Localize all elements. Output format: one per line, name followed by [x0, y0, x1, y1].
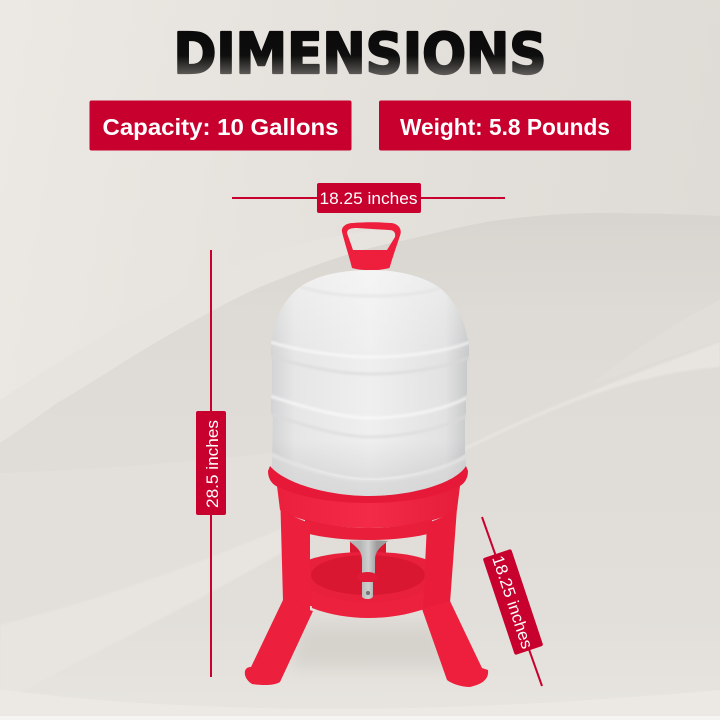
- badge: capacity: [90, 100, 352, 150]
- dimension: depth: 18.25 inches: [488, 553, 536, 651]
- leg left: [280, 508, 310, 612]
- lower stem: [362, 582, 373, 599]
- dimension: depth: [482, 517, 543, 686]
- tray: [308, 552, 428, 606]
- tray front band: [310, 590, 427, 618]
- dimension: width: [232, 183, 505, 213]
- handle and cap: [342, 222, 401, 270]
- stem collar: [357, 572, 378, 582]
- dimension: width: 18.25 inches: [320, 190, 418, 208]
- badge: weight: [379, 100, 631, 150]
- tray well: [311, 555, 425, 595]
- under-bowl ring: [305, 519, 432, 540]
- valve housing: [350, 541, 386, 556]
- base rim: [268, 466, 468, 503]
- stem: [349, 540, 388, 574]
- tank: [265, 265, 475, 500]
- product: poultry drinker: [245, 222, 488, 687]
- dimension: height: [196, 250, 226, 677]
- floor shadow: [290, 625, 452, 668]
- stem hole: [366, 591, 370, 595]
- badge: weight: Weight: 5.8 Pounds: [400, 114, 610, 140]
- badge: capacity: Capacity: 10 Gallons: [102, 114, 338, 140]
- base bowl: [275, 470, 462, 528]
- title: DIMENSIONS: [174, 22, 546, 87]
- foot left: [245, 600, 313, 685]
- leg right: [423, 508, 457, 610]
- dimension: height: 28.5 inches: [204, 420, 222, 508]
- foot right: [422, 601, 488, 687]
- tank bands: [270, 342, 470, 480]
- dome ridge: [339, 294, 392, 297]
